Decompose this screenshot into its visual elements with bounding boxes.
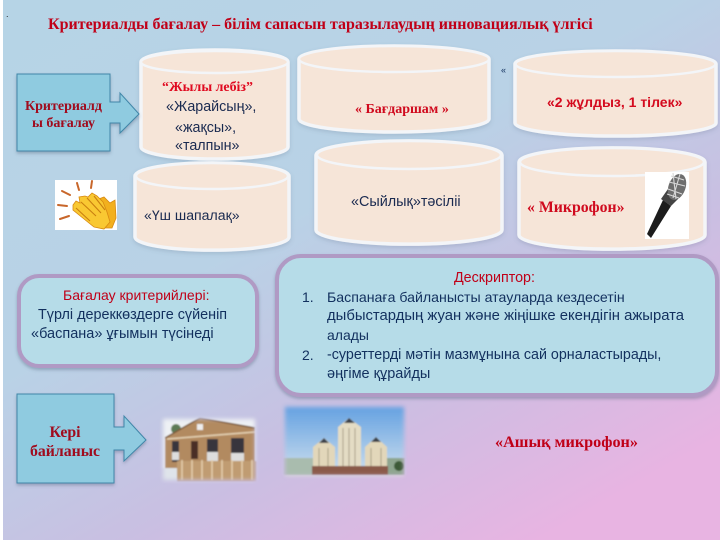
cylinder 1 text: “Жылы лебіз” xyxy=(162,80,253,95)
cylinder 2 xyxy=(299,46,489,132)
descriptor text xyxy=(302,270,684,382)
cylinder 1 text: «талпын» xyxy=(175,138,240,154)
title: Критериалды бағалау – білім сапасын таразылаудың инновациялық үлгісі xyxy=(48,16,593,33)
descriptor text: Баспанаға байланысты атауларда кездесетін xyxy=(327,289,625,305)
assessment criteria text: Түрлі дереккөздерге сүйеніп xyxy=(38,307,227,323)
stray quote: « xyxy=(501,65,506,75)
assessment criteria text: «баспана» ұғымын түсінеді xyxy=(31,326,214,342)
cylinder 6 text: « Микрофон» xyxy=(527,199,624,216)
marker dot: . xyxy=(6,9,9,19)
cylinder 6 xyxy=(519,148,705,249)
photo: city towers xyxy=(282,404,407,477)
assessment criteria text: Бағалау критерийлері: xyxy=(63,287,210,303)
callout arrow: criteria xyxy=(17,74,139,151)
descriptor text: алады xyxy=(327,327,369,343)
label: feedback: байланыс xyxy=(30,443,100,460)
label: feedback: Кері xyxy=(49,424,81,441)
descriptor text: дыбыстардың жуан және жіңішке екендігін ажырата xyxy=(327,308,684,324)
assessment criteria text xyxy=(31,287,227,342)
callout arrow: feedback xyxy=(17,394,146,483)
icon: microphone xyxy=(645,171,690,239)
icon: clapping hands xyxy=(55,180,117,230)
descriptor text: 2. xyxy=(302,347,314,363)
panel: descriptor xyxy=(277,256,717,395)
cylinder 1 text: «Жарайсың», xyxy=(166,99,256,115)
cylinder 5 text: «Сыйлық»тәсіліі xyxy=(351,194,461,210)
cylinder 1 text xyxy=(162,80,256,154)
cylinder 4 text: «Үш шапалақ» xyxy=(144,207,240,223)
descriptor text: Дескриптор: xyxy=(454,270,535,286)
cylinder 4 xyxy=(135,163,289,250)
open microphone text: «Ашық микрофон» xyxy=(495,433,638,451)
cylinder 3 text: «2 жұлдыз, 1 тілек» xyxy=(547,94,682,110)
descriptor text: -суреттерді мәтін мазмұнына сай орналастырады, xyxy=(327,347,661,363)
label: criteria assessment: ы бағалау xyxy=(32,116,95,131)
cylinder 1 text: «жақсы», xyxy=(175,120,236,136)
panel: assessment criteria xyxy=(19,276,257,366)
photo: house xyxy=(161,417,257,482)
cylinder 5 xyxy=(316,141,502,244)
cylinder 3 xyxy=(515,51,716,136)
descriptor text: әңгіме құрайды xyxy=(327,366,430,382)
label: criteria assessment xyxy=(25,99,102,131)
label: feedback xyxy=(30,424,100,460)
cylinder 1 xyxy=(141,50,288,159)
cylinder 2 text: « Бағдаршам » xyxy=(355,102,449,117)
descriptor text: 1. xyxy=(302,289,314,305)
label: criteria assessment: Критериалд xyxy=(25,99,102,114)
